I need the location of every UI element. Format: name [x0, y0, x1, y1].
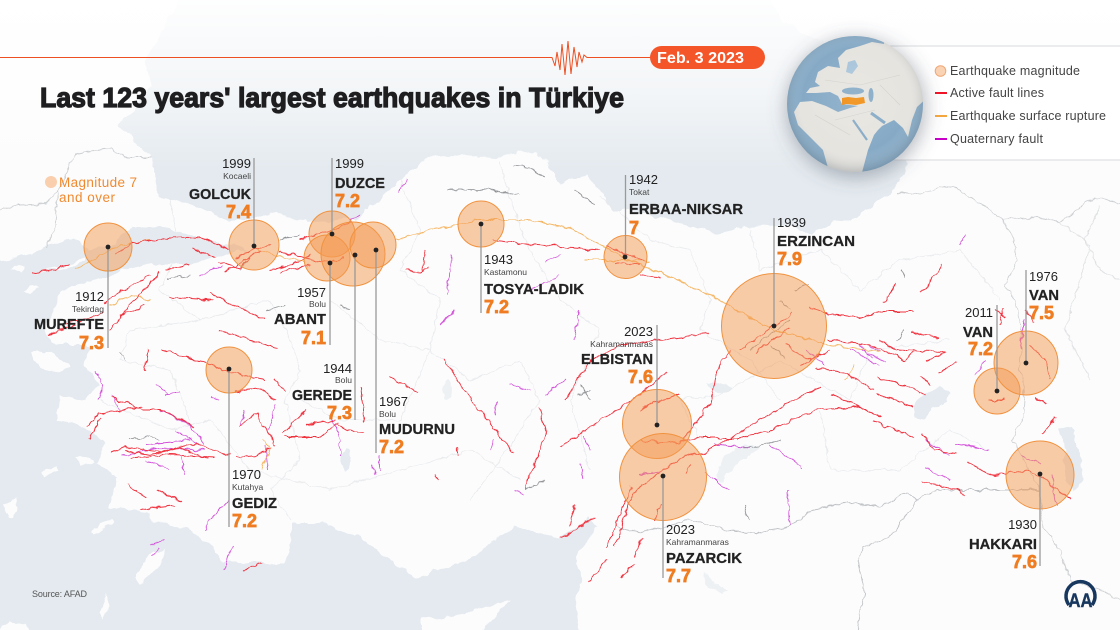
logo: AA: AA — [1068, 591, 1093, 612]
black sea — [842, 88, 864, 94]
label: Gediz: 7.2 — [232, 511, 257, 531]
label: Elbistan: 7.6 — [628, 367, 653, 387]
label: Abant: ABANT — [274, 311, 326, 328]
country and province borders — [0, 148, 1120, 630]
label: Gerede: 7.3 — [327, 403, 352, 423]
note: magnitude 7 and over — [45, 175, 137, 205]
label: Hakkari: HAKKARI — [969, 536, 1037, 553]
legend: active fault lines: Active fault lines — [950, 86, 1044, 100]
lakes and islands — [0, 263, 1082, 630]
legend: earthquake surface rupture: Earthquake surface rupture — [950, 109, 1106, 123]
top fade over map — [0, 0, 1120, 170]
label: Gerede: GEREDE — [292, 387, 352, 404]
note: magnitude 7 and over: Magnitude 7 — [59, 175, 137, 190]
label: Golcuk: 7.4 — [226, 202, 251, 222]
indian ocean — [862, 102, 923, 172]
legend panel — [880, 46, 1120, 160]
label: Golcuk — [189, 156, 251, 222]
label: Murefte: Tekirdag — [72, 304, 104, 314]
label: Erzincan: 7.9 — [777, 249, 802, 269]
note: magnitude 7 and over: and over — [59, 190, 116, 205]
label: Erzincan: 1939 — [777, 215, 806, 230]
label: Elbistan — [581, 324, 653, 387]
label: Tosya-Ladik: 1943 — [484, 252, 513, 267]
label: Golcuk: GOLCUK — [189, 186, 251, 203]
legend: quaternary fault: Quaternary fault — [950, 132, 1044, 146]
header seismograph line — [0, 41, 652, 75]
label: Gediz: 1970 — [232, 467, 261, 482]
label: Gerede: 1944 — [323, 361, 352, 376]
label: Golcuk: Kocaeli — [223, 171, 251, 181]
label: Elbistan: ELBISTAN — [581, 351, 653, 368]
label: Erzincan — [777, 215, 855, 269]
label: Erbaa-Niksar — [629, 172, 743, 238]
label: Hakkari: 1930 — [1008, 517, 1037, 532]
active faults — [32, 222, 1071, 583]
baltic — [846, 60, 858, 74]
label: Duzce: 1999 — [335, 156, 364, 171]
label: Gediz — [232, 467, 277, 531]
label: Erbaa-Niksar: Tokat — [629, 187, 650, 197]
globe shadow — [786, 38, 926, 178]
surface ruptures — [75, 220, 880, 470]
label: Tosya-Ladik: TOSYA-LADIK — [484, 281, 584, 298]
label: Pazarcik — [666, 522, 742, 586]
date badge — [650, 46, 765, 69]
gray faults — [120, 165, 905, 520]
label: Pazarcik: PAZARCIK — [666, 550, 742, 567]
label: Hakkari: 7.6 — [1012, 552, 1037, 572]
label: Duzce: DUZCE — [335, 175, 385, 192]
label: Golcuk: 1999 — [222, 156, 251, 171]
label: Pazarcik: Kahramanmaras — [666, 537, 729, 547]
earthquake magnitude circles — [84, 201, 1074, 520]
label: Mudurnu: 7.2 — [379, 437, 404, 457]
title: Last 123 years' largest earthquakes in Türkiye — [40, 82, 624, 113]
label: Van 2011: VAN — [963, 324, 993, 341]
legend: earthquake magnitude: Earthquake magnitude — [950, 64, 1080, 78]
fault lines — [32, 165, 1071, 583]
epicentre dots — [106, 222, 1042, 478]
source: Source: AFAD — [32, 589, 88, 599]
label: Mudurnu: MUDURNU — [379, 421, 455, 438]
label: Pazarcik: 7.7 — [666, 566, 691, 586]
date badge: Feb. 3 2023 — [657, 50, 744, 67]
label: Gediz: GEDIZ — [232, 495, 277, 512]
atlantic and arctic — [787, 36, 884, 166]
label: Mudurnu — [379, 394, 455, 457]
label: Murefte — [34, 289, 104, 353]
label: Murefte: 7.3 — [79, 333, 104, 353]
label: Pazarcik: 2023 — [666, 522, 695, 537]
label: Tosya-Ladik — [484, 252, 584, 317]
label: Van 1976 — [1029, 269, 1059, 323]
label: Erbaa-Niksar: ERBAA-NIKSAR — [629, 201, 743, 218]
label: Tosya-Ladik: 7.2 — [484, 297, 509, 317]
locator globe — [787, 36, 923, 172]
label: Duzce: 7.2 — [335, 191, 360, 211]
logo: AA — [1066, 582, 1095, 612]
label: Gediz: Kutahya — [232, 482, 263, 492]
quaternary faults — [96, 180, 1056, 570]
label: Mudurnu: Bolu — [379, 409, 396, 419]
label: Tosya-Ladik: Kastamonu — [484, 267, 527, 277]
label: Abant: 7.1 — [301, 328, 326, 348]
label: Van 1976: 1976 — [1029, 269, 1058, 284]
label: Erbaa-Niksar: 1942 — [629, 172, 658, 187]
label: Van 2011: 7.2 — [968, 339, 993, 359]
label: Elbistan: Kahramanmaras — [590, 339, 653, 349]
label: Van 1976: 7.5 — [1029, 303, 1054, 323]
label: Murefte: 1912 — [75, 289, 104, 304]
label: Hakkari — [969, 517, 1037, 572]
label: Van 1976: VAN — [1029, 287, 1059, 304]
label: Elbistan: 2023 — [624, 324, 653, 339]
leader lines — [108, 158, 1040, 578]
caspian — [868, 88, 874, 102]
label: Duzce — [335, 156, 385, 211]
label: Van 2011: 2011 — [965, 305, 993, 320]
label: Erbaa-Niksar: 7 — [629, 218, 639, 238]
label: Erzincan: ERZINCAN — [777, 233, 855, 250]
label: Mudurnu: 1967 — [379, 394, 408, 409]
label: Gerede — [292, 361, 352, 423]
label: Murefte: MUREFTE — [34, 316, 104, 333]
label: Van 2011 — [963, 305, 993, 359]
label: Abant — [274, 285, 326, 348]
label: Abant: 1957 — [297, 285, 326, 300]
label: Gerede: Bolu — [335, 375, 352, 385]
label: Abant: Bolu — [309, 299, 326, 309]
